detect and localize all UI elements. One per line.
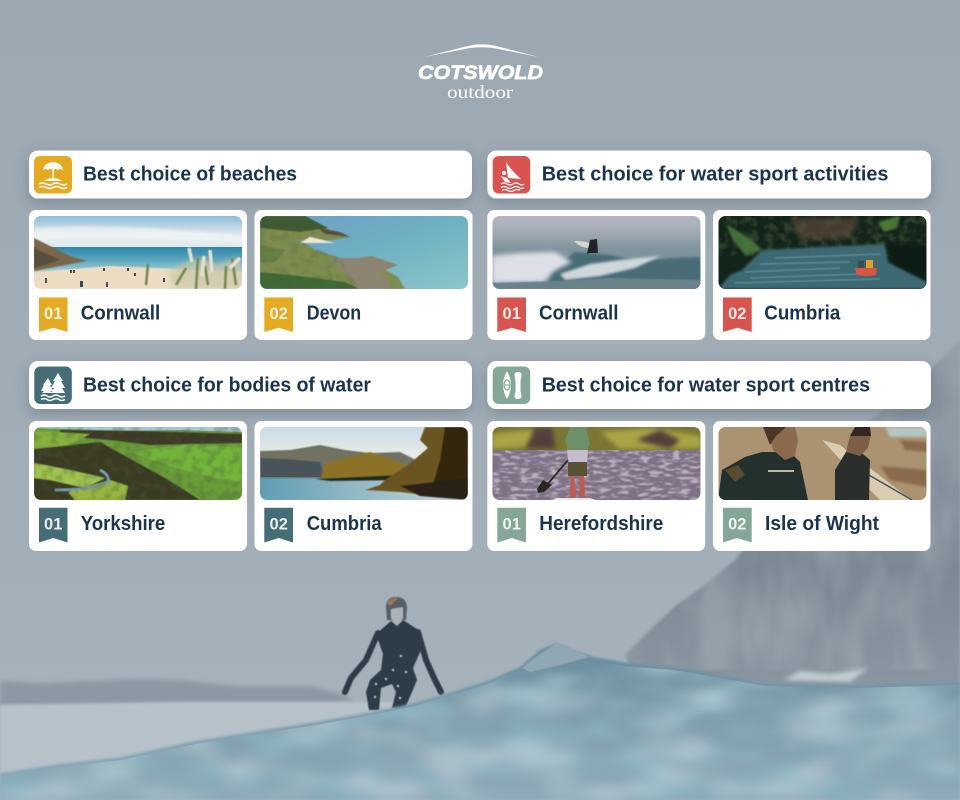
rank badge 02: 02 [728,516,746,534]
rank badge 01: 01 [44,516,62,534]
rank badge 01 [497,298,526,332]
card: Herefordshire: Herefordshire [539,513,663,535]
card: Herefordshire [487,421,705,551]
photo: paddleboarder [492,427,701,500]
rank badge 01: 01 [44,305,62,323]
surfer [345,597,441,710]
photo: Devon coast [260,216,468,289]
card: Cornwall water sports [487,210,705,340]
rank badge 01 [39,508,68,542]
logo: Cotswold Outdoor: COTSWOLD [418,62,543,84]
heading: water sport activities: Best choice for water sport activities [542,163,888,186]
rank badge 02: 02 [728,305,746,323]
card: Cornwall beach: Cornwall [81,302,160,324]
sea behind the surfer [0,702,400,780]
heading: water sport centres [487,361,931,409]
panel: best choice of beaches [29,150,472,340]
rank badge 01 [497,508,526,542]
heading: water sport activities [487,150,931,198]
card: Yorkshire: Yorkshire [81,513,165,535]
distant shoreline [0,679,355,706]
card: Cornwall water sports: Cornwall [539,302,618,324]
headland cliff [625,340,960,695]
rank badge 01 [39,298,68,332]
rank badge 02 [264,298,293,332]
card: Devon beach [254,210,472,340]
card: Yorkshire [29,421,247,551]
icon: windsurfer [493,156,530,194]
rank badge 02 [723,508,752,542]
card: Cumbria lake: Cumbria [307,513,383,535]
photo: Cornwall beach [34,216,242,289]
heading: bodies of water: Best choice for bodies of water [83,373,371,396]
heading: bodies of water [29,361,472,409]
photo: surfer on a breaking wave [492,216,701,289]
photo: Cumbria lake [260,427,468,500]
rank badge 02: 02 [270,516,288,534]
card: Cumbria water sports: Cumbria [764,302,841,324]
card: Isle of Wight: Isle of Wight [765,513,879,535]
card: Cumbria water sports [713,210,930,340]
rank badge 01: 01 [503,516,521,534]
heading: beaches: Best choice of beaches [83,163,297,186]
panel: best choice for water sport activities [487,150,931,340]
photo: raft on a river [718,216,927,289]
icon: kayak and paddle [493,366,530,404]
panel: best choice for bodies of water [29,361,472,551]
card: Devon beach: Devon [307,302,361,324]
heading: water sport centres: Best choice for water sport centres [542,373,870,396]
rank badge 02 [264,508,293,542]
card: Cornwall beach [29,210,247,340]
rank badge 01: 01 [503,305,521,323]
icon: beach umbrella [34,156,72,194]
wave [0,643,960,800]
photo: surfers with boards [718,427,927,500]
logo: Cotswold Outdoor: outdoor [447,82,513,102]
rank badge 02 [723,298,752,332]
card: Cumbria lake [254,421,472,551]
card: Isle of Wight [713,421,930,551]
icon: trees and water [34,366,72,404]
heading: beaches [29,150,472,198]
photo: Yorkshire valley [34,427,242,500]
logo: Cotswold Outdoor [418,44,543,102]
rank badge 02: 02 [270,305,288,323]
panel: best choice for water sport centres [487,361,931,551]
